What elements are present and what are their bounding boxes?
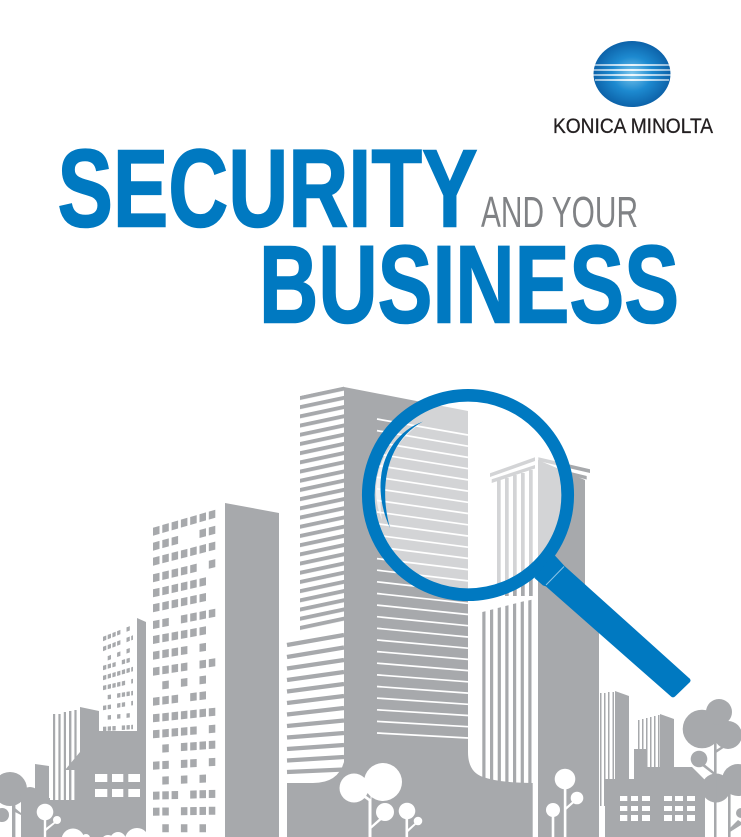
tower lower striped face [287,635,344,772]
tower upper striped face [300,386,344,632]
low block and factory base [605,749,705,837]
title words: AND YOUR: AND YOUR [481,189,638,237]
right tower mass [538,460,599,837]
right tower cap bands [490,457,590,483]
tower main face and base mass [287,387,599,837]
logo sphere [594,41,670,107]
window tower side face [225,503,279,837]
lens tint [374,401,562,589]
left cluster: small buildings and trees [0,618,149,837]
white trees on left base [37,804,149,837]
white trees on central base [340,763,583,837]
white floor lines on tower face [377,419,468,738]
building: window tower [153,503,279,837]
handle with collar [535,554,690,697]
small office building [21,618,146,837]
second tower face [660,714,674,775]
lens highlight arc [380,422,423,528]
right tower upper stripes [497,470,533,596]
factory windows [620,796,695,821]
building: central tall tower and base [287,386,599,837]
collar separator [546,566,564,585]
lens glare [376,424,420,520]
logo wordmark: KONICA MINOLTA [553,115,713,138]
window tower window rows [153,513,216,828]
right cluster: small buildings, factory and trees [600,691,741,837]
title [58,128,679,346]
right tower white recess [468,740,538,783]
small tower [35,764,49,805]
small tower face [615,691,629,785]
city skyline illustration [0,386,741,837]
logo: Konica Minolta [553,41,713,138]
vertical stripe block [53,710,77,800]
second striped tower [638,715,660,770]
lens ring [368,395,568,595]
right tower lower stripes [482,600,532,784]
small striped tower [600,692,614,806]
grey trees right [683,699,741,837]
white gaps under right trees [705,803,728,837]
small office windows [103,627,133,729]
white gap line in base [533,780,538,837]
office white windows [95,774,140,797]
tree silhouette left [0,772,40,837]
title word: SECURITY: SECURITY [58,128,478,250]
magnifying glass [368,395,690,697]
